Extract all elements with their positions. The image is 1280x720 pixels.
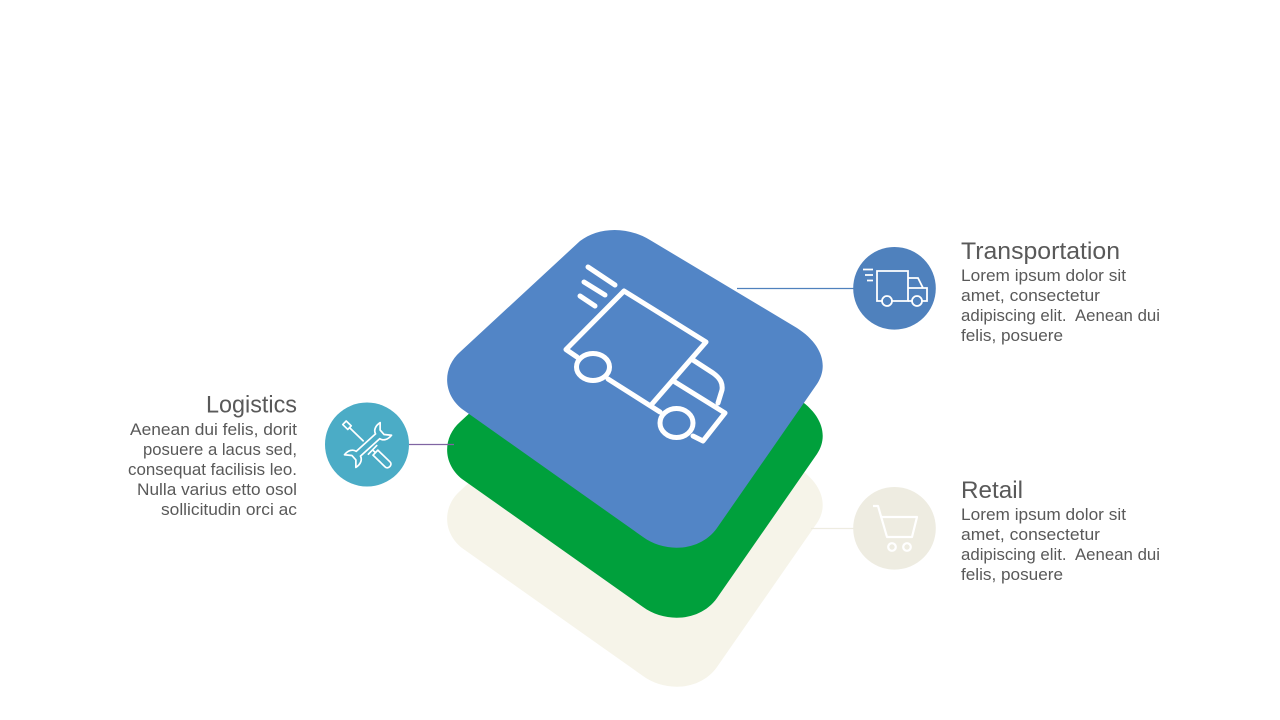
layer: cream retail (447, 369, 823, 687)
text block: transportation: felis, posuere (961, 326, 1063, 345)
text block: logistics: sollicitudin orci ac (161, 500, 297, 519)
text block: transportation: Lorem ipsum dolor sit (961, 266, 1126, 285)
icon: retail circle (853, 487, 936, 570)
icon: large delivery truck (566, 267, 725, 441)
text block: logistics: Logistics (206, 392, 297, 418)
text block: logistics (128, 392, 297, 519)
text block: logistics: posuere a lacus sed, (143, 440, 297, 459)
text block: transportation: Transportation (961, 238, 1120, 265)
icon: transportation circle (853, 247, 936, 330)
text block: retail: Lorem ipsum dolor sit (961, 505, 1126, 524)
text block: logistics: Nulla varius etto osol (137, 480, 297, 499)
text block: retail (961, 477, 1160, 584)
text block: transportation: amet, consectetur (961, 286, 1100, 305)
text block: retail: Retail (961, 477, 1023, 504)
text block: logistics: consequat facilisis leo. (128, 460, 297, 479)
connector: retail (811, 528, 854, 530)
connector: logistics (409, 444, 454, 446)
text block: transportation (961, 238, 1160, 345)
layer: blue transportation (447, 230, 823, 548)
text block: retail: adipiscing elit. Aenean dui (961, 545, 1160, 564)
layer: green logistics (447, 300, 823, 618)
icon: logistics circle (325, 402, 409, 486)
connector: transportation (737, 288, 854, 290)
text block: retail: amet, consectetur (961, 525, 1100, 544)
text block: transportation: adipiscing elit. Aenean dui (961, 306, 1160, 325)
text block: retail: felis, posuere (961, 565, 1063, 584)
text block: logistics: Aenean dui felis, dorit (130, 420, 297, 439)
